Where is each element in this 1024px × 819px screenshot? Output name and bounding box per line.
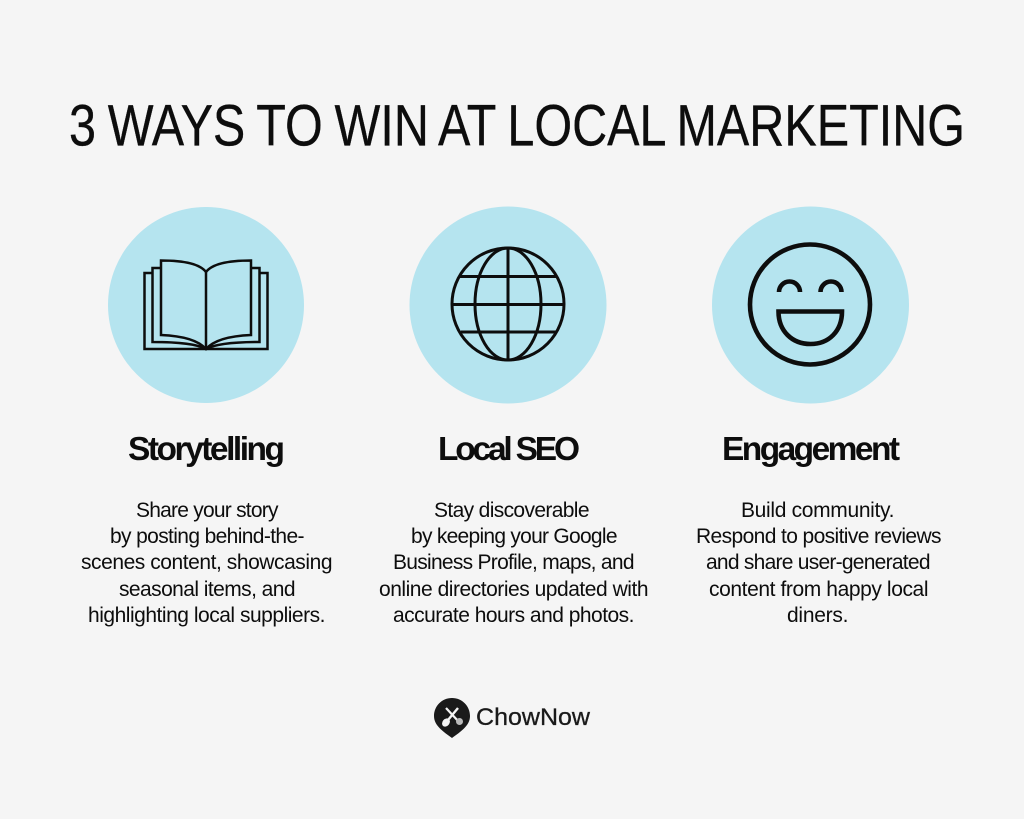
text block: engagement description: diners.	[787, 604, 848, 627]
panel: local SEO	[379, 206, 648, 627]
text block: storytelling description: scenes content, showcasing	[81, 551, 332, 574]
logo: ChowNow	[434, 698, 590, 738]
icon: pin with fork and spoon	[434, 698, 470, 738]
text block: storytelling description: by posting behind-the-	[110, 525, 304, 548]
text block: local SEO description: by keeping your Google	[411, 525, 618, 548]
icon: smiling face	[712, 206, 909, 404]
text block: engagement description: Respond to positive reviews	[696, 525, 942, 548]
text block: storytelling description: highlighting local suppliers.	[88, 604, 326, 627]
wordmark: ChowNow	[476, 704, 590, 731]
text block: engagement description	[696, 499, 942, 627]
panel: storytelling	[81, 207, 332, 627]
text block: local SEO description: Stay discoverable	[434, 499, 590, 522]
heading: Engagement: Engagement	[722, 431, 900, 468]
text block: engagement description: Build community.	[741, 499, 894, 522]
text block: local SEO description: accurate hours and photos.	[393, 604, 634, 627]
text block: local SEO description	[379, 499, 648, 627]
text block: storytelling description	[81, 499, 332, 627]
heading: Storytelling: Storytelling	[128, 431, 285, 468]
panel: engagement	[696, 206, 942, 627]
text block: storytelling description: Share your story	[136, 499, 279, 522]
icon: globe	[410, 206, 606, 404]
text block: engagement description: content from happy local	[709, 578, 928, 601]
icon: open book	[108, 207, 304, 403]
text block: local SEO description: online directories updated with	[379, 578, 648, 601]
text block: local SEO description: Business Profile, maps, and	[393, 551, 634, 574]
text block: storytelling description: seasonal items, and	[119, 578, 296, 601]
heading: Local SEO: Local SEO	[438, 431, 580, 468]
text block: engagement description: and share user-generated	[706, 551, 930, 574]
